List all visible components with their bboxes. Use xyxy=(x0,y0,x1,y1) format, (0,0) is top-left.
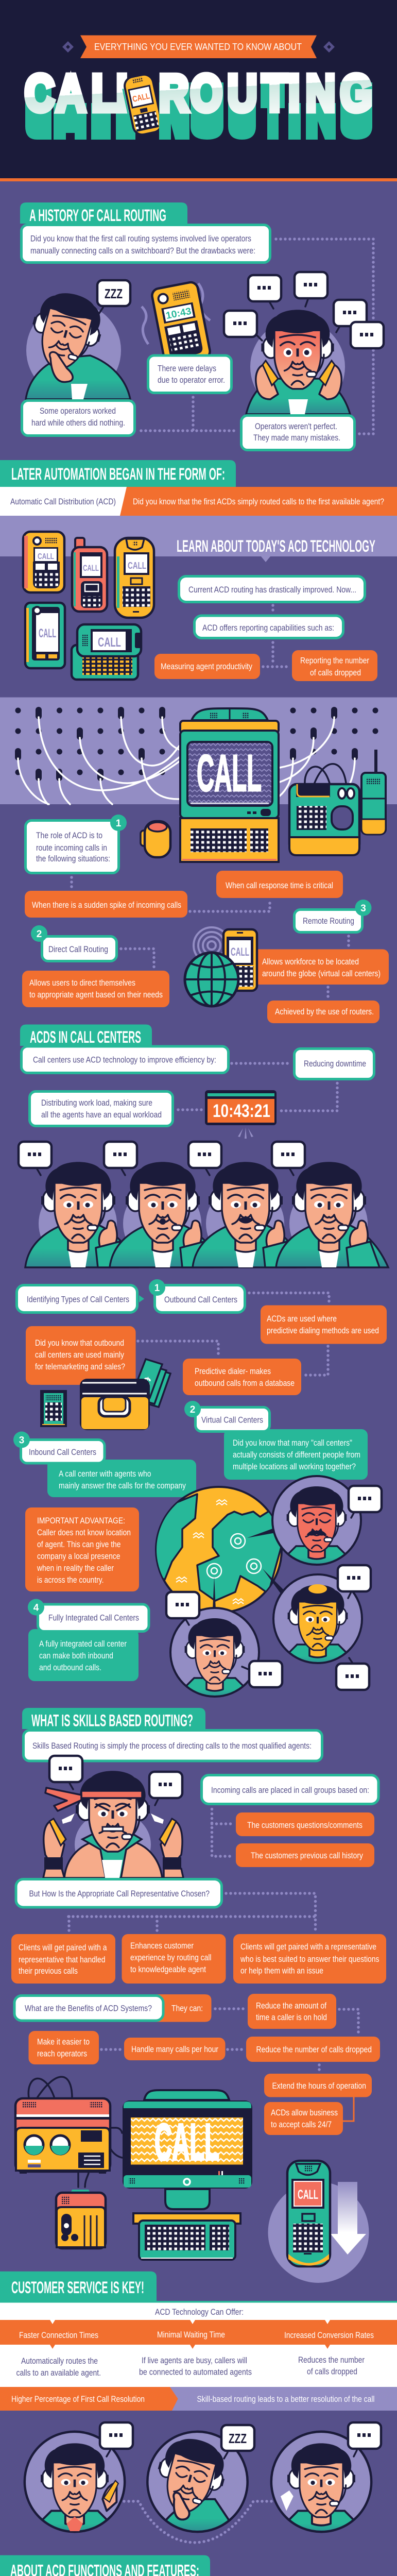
icon: money: $ xyxy=(141,1374,153,1392)
section heading: a history of call routing xyxy=(20,202,187,225)
icon: server xyxy=(40,1390,67,1427)
callout: 24/7: ACDs allow business xyxy=(271,2108,338,2117)
icon: briefcase xyxy=(80,1379,150,1430)
connector: downtime dots xyxy=(280,1083,337,1111)
panel: some operators xyxy=(22,401,135,436)
illustration: phone with arrow xyxy=(268,2161,369,2283)
callout: calls dropped xyxy=(246,2037,380,2062)
bubble: warrior right xyxy=(149,1772,182,1805)
panel: fully integrated desc: A fully integrated call center xyxy=(39,1639,127,1649)
icon: money xyxy=(133,1359,170,1407)
panel: fully integrated desc xyxy=(28,1629,139,1681)
section heading: a history of call routing: A HISTORY OF CALL ROUTING xyxy=(29,206,166,225)
panel: reducing downtime xyxy=(295,1049,374,1079)
panel: role of acd: the following situations: xyxy=(36,854,110,863)
callout: allows workforce: Allows workforce to be located xyxy=(262,957,359,967)
callout: response critical xyxy=(216,871,343,898)
panel: virtual call centers desc: multiple locations all working together? xyxy=(233,1462,356,1471)
callout: important advantage: when in reality the caller xyxy=(37,1564,114,1573)
callout: many calls xyxy=(124,2038,226,2060)
portrait: agent frown xyxy=(271,2432,371,2534)
panel: fully integrated desc: can make both inbound xyxy=(39,1651,113,1660)
panel: acd offers: ACD offers reporting capabilities such as: xyxy=(202,623,334,633)
text: waiting time detail: be connected to automated agents xyxy=(139,2368,252,2377)
panel: remote routing xyxy=(295,910,363,933)
panel: delays: There were delays xyxy=(158,364,216,373)
panel: virtual call centers desc: Did you know that many "call centers" xyxy=(233,1438,352,1448)
callout: previous calls xyxy=(11,1934,115,1984)
panel: how representative chosen xyxy=(16,1879,221,1907)
bubble: zzz: ZZZ xyxy=(105,286,123,301)
band: three benefits: Faster Connection Times xyxy=(19,2331,98,2340)
bubble: warrior left xyxy=(49,1756,82,1789)
callout: customer history: The customers previous call history xyxy=(251,1851,364,1860)
illustration: agent row xyxy=(25,1162,388,1267)
badge: 4: 4 xyxy=(33,1602,39,1614)
band: three benefits: Increased Conversion Rates xyxy=(284,2331,374,2340)
callout: allows workforce xyxy=(252,949,389,985)
callout: allows users: Allows users to direct themselves xyxy=(29,978,135,988)
panel: reducing downtime: Reducing downtime xyxy=(304,1059,366,1069)
badge: 3 inbound: 3 xyxy=(19,1435,24,1446)
panel: role of acd: The role of ACD is to xyxy=(36,831,102,840)
panel: call centers use acd: Call centers use ACD technology to improve efficiency by: xyxy=(33,1055,216,1064)
callout: sudden spike xyxy=(25,891,187,918)
connector: telemarketing dots xyxy=(138,1341,218,1356)
bubble: agent 3 upper xyxy=(166,1592,199,1625)
panel: role of acd xyxy=(26,820,118,873)
band: three benefits xyxy=(0,2320,397,2349)
text: waiting time detail xyxy=(139,2356,252,2377)
panel: virtual call centers: Virtual Call Centers xyxy=(201,1416,263,1425)
callout: important advantage: company a local presence xyxy=(37,1552,120,1561)
panel: some operators: hard while others did nothing. xyxy=(31,418,125,428)
icon: coffee cup xyxy=(141,821,170,857)
header rule xyxy=(0,178,397,181)
banner: everything you ever wanted xyxy=(80,35,317,58)
callout: telemarketing: Did you know that outbound xyxy=(35,1338,124,1348)
illustration: mixer device xyxy=(15,2077,122,2187)
callout: they can: They can: xyxy=(171,2004,203,2013)
callout: predictive dialer xyxy=(183,1359,301,1395)
badge: 2 xyxy=(31,925,47,942)
callout: easier xyxy=(29,2031,99,2064)
panel: distributing work load xyxy=(30,1091,173,1126)
icon: phone d xyxy=(25,603,65,668)
text: conversion detail: of calls dropped xyxy=(307,2367,357,2376)
badge: 2 virtual xyxy=(184,1401,201,1417)
callout: reporting dropped calls: Reporting the number xyxy=(300,656,369,666)
icon: phone and globe: CALL xyxy=(231,945,249,958)
callout: previous calls: Clients will get paired with a xyxy=(19,1943,107,1953)
callout: reporting dropped calls xyxy=(292,650,377,681)
callout: best suited: or help them with an issue xyxy=(240,1967,323,1976)
illustration: phone with arrow: CALL xyxy=(298,2188,318,2202)
connector: history dots xyxy=(276,239,373,434)
panel: skills based definition: Skills Based Routing is simply the process of directing calls to the most qualified agents: xyxy=(32,1741,312,1751)
panel: virtual call centers desc xyxy=(224,1429,368,1480)
panel: some operators: Some operators worked xyxy=(40,406,116,416)
callout: previous calls: their previous calls xyxy=(19,1967,78,1976)
badge: 1 xyxy=(110,815,127,831)
portrait: remote agent 3 xyxy=(170,1608,259,1699)
connector: dialer dots xyxy=(303,1346,328,1375)
badge: 4 xyxy=(28,1599,44,1616)
portrait: sleeping agent xyxy=(147,2432,248,2534)
connector: hours line xyxy=(343,2097,354,2121)
callout: predictive acds: predictive dialing methods are used xyxy=(267,1326,379,1335)
panel: outbound call centers xyxy=(154,1285,245,1313)
illustration: call monitor large xyxy=(123,2090,252,2209)
bubbles: many messages xyxy=(224,272,384,348)
illustration: keyboard large xyxy=(133,2213,240,2260)
callout: customer questions xyxy=(236,1812,374,1836)
icon: diamond left xyxy=(62,41,74,53)
badge: 2 virtual: 2 xyxy=(190,1404,195,1415)
panel: role of acd: route incoming calls in xyxy=(36,843,107,853)
icon: phone a xyxy=(23,532,64,592)
text: faster connection detail xyxy=(16,2357,101,2378)
callout: predictive acds: ACDs are used where xyxy=(267,1314,337,1324)
callout: extend hours xyxy=(264,2074,372,2097)
panel: fully integrated call centers: Fully Integrated Call Centers xyxy=(48,1614,139,1623)
callout: measuring agent productivity xyxy=(154,654,260,679)
text: faster connection detail: Automatically routes the xyxy=(21,2357,98,2366)
bubble: zzz xyxy=(97,280,130,314)
icon: ringing rays xyxy=(238,1127,253,1139)
panel: distributing work load: all the agents have an equal workload xyxy=(41,1110,162,1120)
panel: incoming calls placed: Incoming calls are placed in call groups based on: xyxy=(211,1786,369,1795)
connector: hold dots xyxy=(339,2009,358,2033)
illustration: stressed operator xyxy=(246,310,350,414)
callout: enhances experience xyxy=(122,1934,226,1984)
illustration: small mixer xyxy=(56,2190,106,2248)
panel: current acd routing xyxy=(179,576,365,602)
connector: efficiency dots xyxy=(232,1062,290,1065)
panel: direct call routing: Direct Call Routing xyxy=(48,945,108,954)
section heading: acds in call centers: ACDS IN CALL CENTERS xyxy=(30,1028,141,1046)
map: globe with locations xyxy=(149,1487,288,1613)
callout: achieved by routers xyxy=(267,1001,379,1023)
panel: inbound desc: A call center with agents who xyxy=(59,1469,151,1479)
panel: benefits of acd xyxy=(14,1996,163,2021)
panel: remote routing: Remote Routing xyxy=(303,917,354,926)
text: conversion detail: Reduces the number xyxy=(298,2355,365,2365)
badge: 1 outbound: 1 xyxy=(154,1283,160,1294)
callout: predictive acds xyxy=(261,1306,387,1344)
banner: everything you ever wanted: EVERYTHING YOU EVER WANTED TO KNOW ABOUT xyxy=(94,42,302,52)
callout: hold time: time a caller is on hold xyxy=(256,2013,327,2022)
bubbles: agent row xyxy=(19,1142,305,1175)
portrait: manager on phone xyxy=(25,2432,125,2534)
icon: slider phone e xyxy=(72,624,141,680)
connector: role dots xyxy=(70,877,73,888)
badge: 3 xyxy=(355,900,372,916)
section heading: skills based routing xyxy=(22,1708,205,1730)
icon: slider phone e: CALL xyxy=(98,635,121,650)
icon: ringing phone: 10:43 xyxy=(165,306,192,321)
callout: reporting dropped calls: of calls dropped xyxy=(310,668,361,677)
section heading: customer service is key xyxy=(0,2272,157,2301)
header band xyxy=(0,0,397,178)
connector: workforce dots xyxy=(326,987,330,998)
panel: incoming calls placed xyxy=(202,1775,378,1804)
callout: easier: reach operators xyxy=(37,2049,87,2059)
icon: ringing phone xyxy=(142,281,211,366)
callout: best suited: Clients will get paired with a representative xyxy=(240,1942,376,1952)
panel: operators not perfect: They made many mistakes. xyxy=(253,433,340,443)
connector: clock dots xyxy=(178,1108,203,1111)
bubble: agent 2 xyxy=(338,1565,371,1598)
title: call routing: CALL xyxy=(132,92,151,104)
panel: history intro xyxy=(22,225,270,263)
panel: distributing work load: Distributing work load, making sure xyxy=(41,1098,152,1108)
badge: 1 outbound xyxy=(149,1279,165,1296)
callout: 24/7: to accept calls 24/7 xyxy=(271,2120,332,2129)
connector: dots xyxy=(263,605,288,667)
icon: digital clock: 10:43:21 xyxy=(213,1101,270,1121)
callout: predictive dialer: outbound calls from a database xyxy=(195,1379,295,1388)
badge: 2: 2 xyxy=(37,929,42,940)
panel: operators not perfect: Operators weren't perfect. xyxy=(255,422,337,431)
panel: inbound desc: mainly answer the calls for the company xyxy=(59,1481,186,1490)
callout: telemarketing: call centers are used mainly xyxy=(35,1350,125,1360)
illustration: warrior agent xyxy=(43,1771,183,1878)
panel: outbound call centers: Outbound Call Centers xyxy=(164,1295,237,1304)
callout: customer questions: The customers questions/comments xyxy=(247,1821,363,1830)
icon: phone d: CALL xyxy=(39,626,56,640)
illustration: call monitor xyxy=(180,708,279,862)
callout: achieved by routers: Achieved by the use of routers. xyxy=(275,1007,374,1016)
bubble: zzz agent xyxy=(221,2425,254,2459)
panel: current acd routing: Current ACD routing has drastically improved. Now... xyxy=(188,585,356,595)
callout: calls dropped: Reduce the number of calls dropped xyxy=(256,2045,372,2055)
panel: identifying types xyxy=(16,1285,144,1313)
panel: fully integrated call centers xyxy=(38,1604,149,1631)
callout: predictive dialer: Predictive dialer- makes xyxy=(195,1367,271,1376)
icon: phone c xyxy=(115,538,154,618)
callout: allows users: to appropriate agent based on their needs xyxy=(29,990,163,999)
panel: operators not perfect xyxy=(241,415,354,450)
panel: direct call routing xyxy=(42,937,116,961)
connector: chosen dots xyxy=(68,1893,315,1931)
bubble: agent 1 xyxy=(349,1486,382,1518)
panel: inbound desc xyxy=(47,1460,196,1497)
icon: phone a: CALL xyxy=(38,552,54,561)
band: acd technology can offer: ACD Technology Can Offer: xyxy=(155,2308,244,2317)
callout: easier: Make it easier to xyxy=(37,2038,90,2047)
portrait: remote agent 2 xyxy=(273,1574,362,1665)
band: acd technology can offer xyxy=(0,2303,397,2387)
callout: hold time xyxy=(248,1994,336,2029)
callout: important advantage: Caller does not know location xyxy=(37,1528,131,1537)
text: conversion detail xyxy=(298,2355,365,2376)
callout: customer history xyxy=(236,1843,374,1867)
connector: spike dots xyxy=(190,901,270,911)
callout: they can xyxy=(154,1994,211,2022)
section rule xyxy=(0,2301,397,2303)
connector: history dots lower xyxy=(141,397,236,431)
panel: identifying types: Identifying Types of Call Centers xyxy=(27,1295,129,1304)
icon: phone b: CALL xyxy=(83,563,99,573)
band: automatic call distribution: Automatic Call Distribution (ACD) xyxy=(10,497,116,506)
band: first call resolution xyxy=(0,2387,397,2411)
portrait: remote agent 1 xyxy=(272,1476,361,1567)
connector: remote dots xyxy=(347,936,350,947)
callout: measuring agent productivity: Measuring agent productivity xyxy=(161,662,253,671)
icon: diamond right xyxy=(323,41,335,53)
band: three benefits: Minimal Waiting Time xyxy=(157,2330,225,2340)
callout: best suited xyxy=(233,1934,386,1984)
panel: delays: due to operator error. xyxy=(158,376,225,385)
badge: 3: 3 xyxy=(360,903,366,914)
illustration: call monitor: CALL xyxy=(197,744,262,802)
icon: phone c: CALL xyxy=(128,561,146,571)
bubble: zzz agent: ZZZ xyxy=(229,2431,247,2446)
callout: sudden spike: When there is a sudden spike of incoming calls xyxy=(32,901,181,910)
connector: outbound dots xyxy=(249,1293,329,1303)
panel: skills based definition xyxy=(24,1730,322,1761)
callout: telemarketing xyxy=(26,1326,136,1385)
badge: 3 inbound xyxy=(13,1431,30,1448)
panel: benefits of acd: What are the Benefits of ACD Systems? xyxy=(25,2004,152,2013)
icon: phone and globe xyxy=(185,927,257,1006)
callout: telemarketing: for telemarketing and sales? xyxy=(35,1362,125,1371)
callout: hold time: Reduce the amount of xyxy=(256,2001,326,2010)
callout: enhances experience: Enhances customer xyxy=(130,1941,194,1951)
panel: delays xyxy=(148,355,232,393)
callout: enhances experience: to knowledgeable agent xyxy=(130,1965,206,1974)
panel: fully integrated desc: and outbound calls. xyxy=(39,1663,101,1672)
callout: important advantage: IMPORTANT ADVANTAGE: xyxy=(37,1516,125,1526)
connector: direct dots xyxy=(121,949,154,968)
panel: history intro: manually connecting calls on a switchboard? But the drawbacks were: xyxy=(30,246,255,256)
badge: 1: 1 xyxy=(116,818,122,829)
illustration: call monitor large: CALL xyxy=(154,2113,219,2171)
callout: enhances experience: experience by routing call xyxy=(130,1953,211,1962)
bubble: extra xyxy=(336,1658,369,1690)
illustration: sleeping operator xyxy=(23,286,130,399)
panel: inbound call centers xyxy=(21,1439,105,1463)
section heading: about acd functions xyxy=(0,2555,210,2576)
heading: learn about today's acd technology xyxy=(0,516,397,562)
section heading: later automation xyxy=(0,460,236,487)
panel: history intro: Did you know that the first call routing systems involved live operators xyxy=(30,234,251,243)
callout: many calls: Handle many calls per hour xyxy=(131,2045,218,2054)
section heading: acds in call centers xyxy=(20,1024,152,1046)
callout: response critical: When call response time is critical xyxy=(226,881,333,890)
connector: handle dots xyxy=(101,2049,319,2070)
section heading: customer service is key: CUSTOMER SERVICE IS KEY! xyxy=(11,2278,144,2297)
band: first call resolution: Higher Percentage of First Call Resolution xyxy=(11,2395,145,2404)
panel: call centers use acd xyxy=(22,1046,229,1073)
bubble: agent frown xyxy=(348,2422,381,2456)
callout: extend hours: Extend the hours of operation xyxy=(272,2081,366,2091)
callout: important advantage xyxy=(25,1507,139,1591)
callout: 24/7 xyxy=(264,2102,343,2135)
bubble: agent 3 lower xyxy=(242,1661,282,1687)
text: waiting time detail: If live agents are busy, callers will xyxy=(142,2356,247,2365)
callout: previous calls: representative that handled xyxy=(19,1955,105,1964)
callout: important advantage: is across the country. xyxy=(37,1575,104,1585)
band: automatic call distribution xyxy=(0,487,397,516)
illustration: desk phone with handset xyxy=(289,750,386,855)
panel: virtual call centers xyxy=(196,1408,270,1431)
section heading: skills based routing: WHAT IS SKILLS BASED ROUTING? xyxy=(31,1711,193,1730)
connector: curved dots xyxy=(124,2501,273,2543)
title: call routing: CALL ROUTING xyxy=(25,65,372,122)
connector: incoming dots xyxy=(212,1809,232,1856)
panel: acd offers xyxy=(195,616,343,638)
panel: virtual call centers desc: actually consists of different people from xyxy=(233,1450,360,1460)
callout: allows users xyxy=(22,971,169,1007)
icon: phone b xyxy=(72,538,107,612)
section heading: later automation: LATER AUTOMATION BEGAN IN THE FORM OF: xyxy=(11,465,225,483)
panel: how representative chosen: But How Is the Appropriate Call Representative Chosen? xyxy=(29,1889,210,1899)
panel: inbound call centers: Inbound Call Centers xyxy=(29,1448,96,1457)
bubble: manager xyxy=(100,2422,133,2456)
switchboard band xyxy=(0,698,397,804)
callout: important advantage: of agent. This can give the xyxy=(37,1540,120,1549)
icon: digital clock xyxy=(205,1090,277,1125)
text: faster connection detail: calls to an available agent. xyxy=(16,2368,101,2378)
connector: benefits dots xyxy=(215,2007,245,2010)
